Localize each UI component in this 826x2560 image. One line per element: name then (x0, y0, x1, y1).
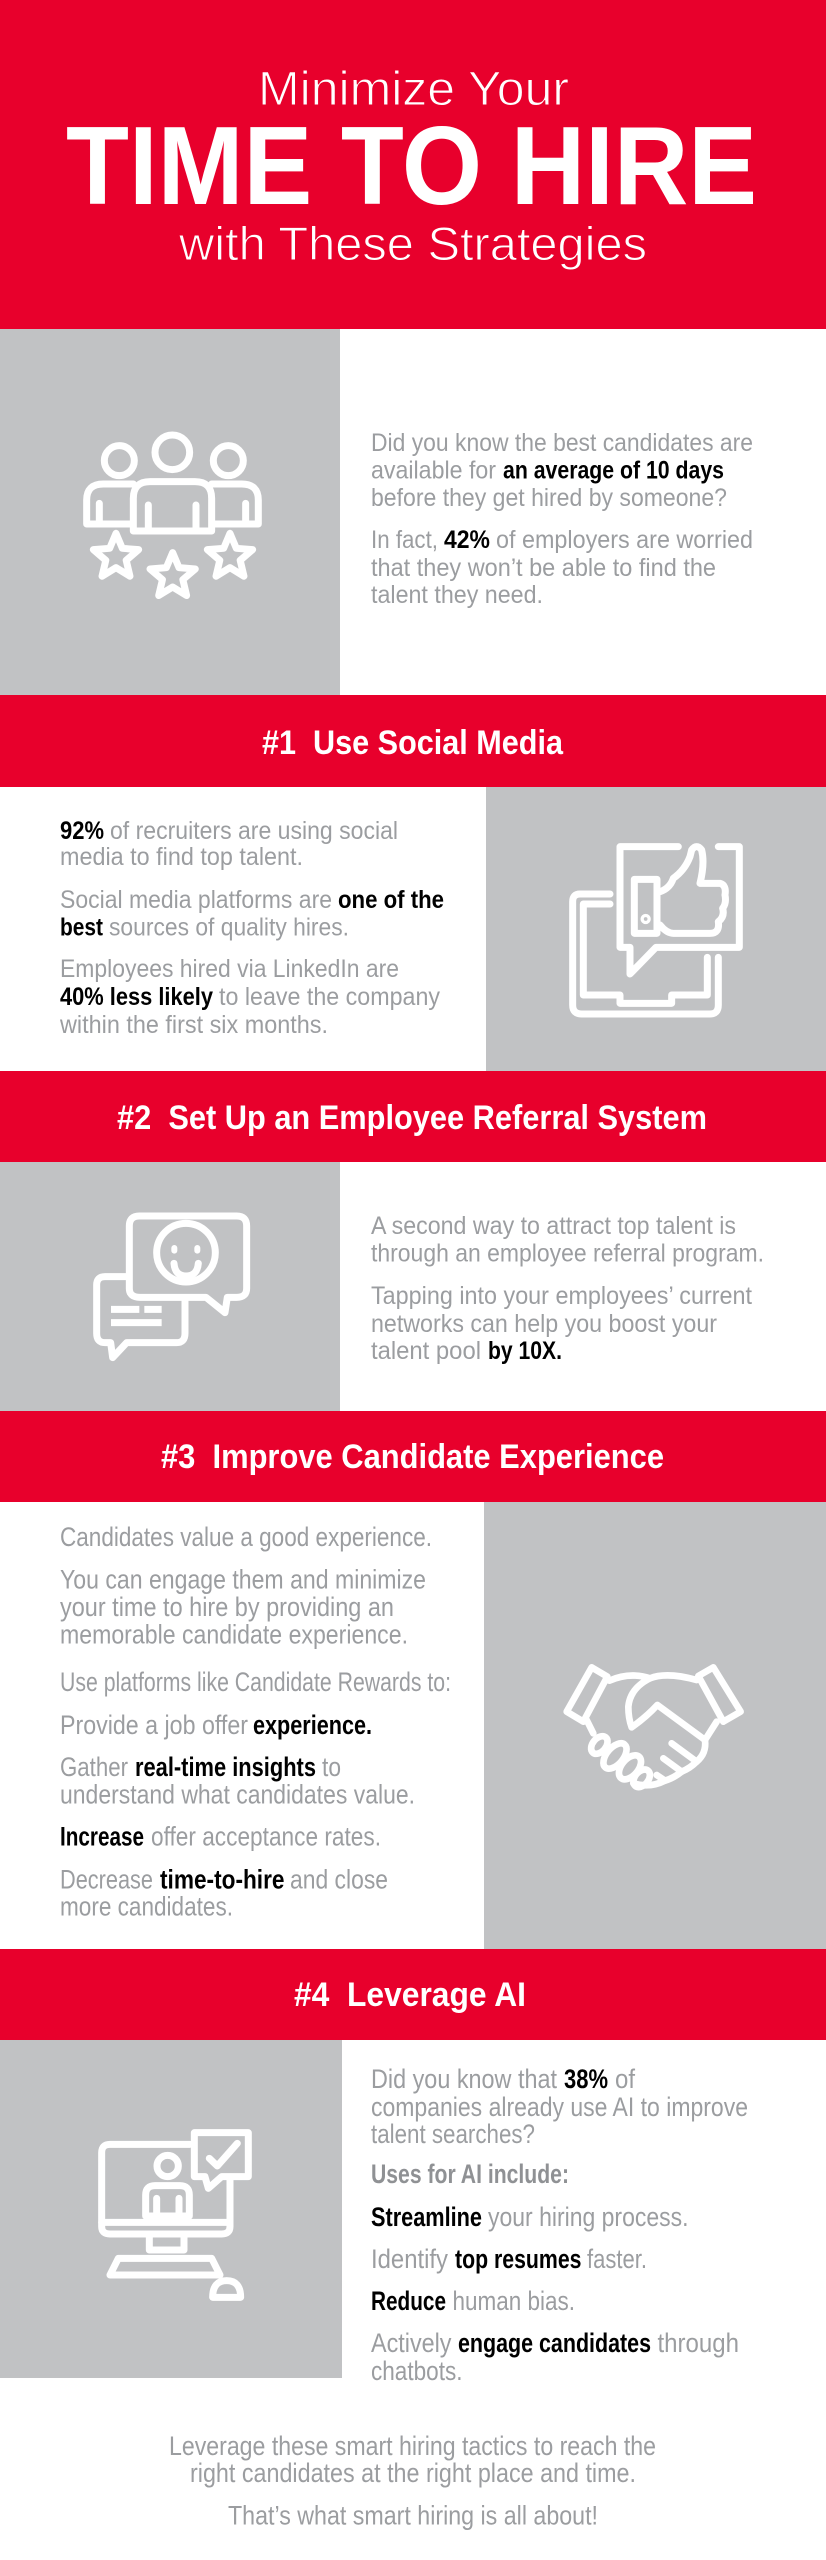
text block: leverage AI: top resumes (455, 2244, 582, 2274)
text block: intro: In fact, (371, 526, 438, 554)
text block: referral system (371, 1212, 764, 1365)
text block: candidate experience: your time to hire by providing an (60, 1592, 394, 1622)
text block: intro: that they won’t be able to find the (371, 554, 716, 582)
text block: referral system: networks can help you boost your (371, 1310, 717, 1338)
icon: people with stars (87, 435, 258, 596)
heading band: #4 Leverage AI (0, 1949, 826, 2040)
panel: intro (0, 329, 753, 695)
text block: intro (371, 429, 753, 609)
text block: social media: best (60, 914, 104, 942)
text block: candidate experience: offer acceptance rates. (151, 1822, 381, 1852)
text block: social media: of recruiters are using social (110, 817, 398, 845)
text block: candidate experience: more candidates. (60, 1892, 233, 1922)
panel: referral system (0, 1162, 764, 1411)
heading band: #1 Use Social Media: #1 Use Social Media (262, 724, 564, 762)
text block: leverage AI: through (658, 2328, 739, 2358)
text block: leverage AI: Identify (371, 2244, 449, 2274)
text block: leverage AI: Streamline (371, 2202, 482, 2232)
text block: intro: of employers are worried (496, 526, 753, 554)
heading band: #1 Use Social Media (0, 695, 826, 787)
text block: candidate experience: Decrease (60, 1864, 153, 1894)
text block: candidate experience: Use platforms like Candidate Rewards to: (60, 1667, 451, 1697)
heading band: #2 Set Up an Employee Referral System: #2 Set Up an Employee Referral System (117, 1099, 707, 1137)
text block: leverage AI: 38% (564, 2064, 608, 2094)
text block: intro: an average of 10 days (503, 456, 724, 484)
heading band: #4 Leverage AI: #4 Leverage AI (294, 1976, 526, 2014)
panel: social media (59, 787, 826, 1071)
text block: social media: Social media platforms are (60, 886, 332, 914)
text block: candidate experience: real-time insights (135, 1752, 316, 1782)
text block: leverage AI (371, 2064, 748, 2386)
text block: social media: Employees hired via LinkedIn are (60, 955, 399, 983)
text block: candidate experience: Candidates value a good experience. (60, 1522, 432, 1552)
text block: leverage AI: Did you know that (371, 2064, 558, 2094)
heading band: #3 Improve Candidate Experience (0, 1411, 826, 1502)
text block: candidate experience: Gather (60, 1752, 128, 1782)
text block: social media: within the first six months. (59, 1011, 328, 1039)
text block: social media (59, 817, 444, 1039)
text block: referral system: Tapping into your employees’ current (371, 1282, 752, 1310)
text block: candidate experience: Increase (60, 1822, 144, 1852)
icon: chat bubbles with smile (97, 1216, 247, 1358)
heading band: #3 Improve Candidate Experience: #3 Improve Candidate Experience (161, 1438, 664, 1476)
text block: candidate experience (60, 1522, 451, 1922)
text block: social media: media to find top talent. (60, 843, 303, 871)
text block: referral system: talent pool (371, 1337, 481, 1365)
text block: candidate experience: memorable candidate experience. (60, 1620, 408, 1650)
text block: leverage AI: companies already use AI to improve (371, 2092, 748, 2122)
text block: intro: talent they need. (371, 581, 543, 609)
icon: computer with person and checkmark (102, 2133, 248, 2297)
text block: intro: before they get hired by someone? (371, 484, 727, 512)
title: Minimize Your (258, 63, 569, 116)
text block: intro: Did you know the best candidates are (371, 429, 753, 457)
text block: leverage AI: Actively (371, 2328, 452, 2358)
closing text: Leverage these smart hiring tactics to reach the (169, 2431, 656, 2461)
text block: referral system: A second way to attract top talent is (371, 1212, 736, 1240)
title: TIME TO HIRE (66, 104, 757, 228)
text block: candidate experience: experience. (253, 1710, 372, 1740)
text block: social media: 92% (60, 817, 104, 845)
text block: leverage AI: talent searches? (371, 2119, 535, 2149)
text block: social media: 40% less likely (60, 983, 213, 1011)
closing text: That’s what smart hiring is all about! (228, 2500, 598, 2530)
text block: candidate experience: time-to-hire (160, 1864, 284, 1894)
text block: social media: to leave the company (219, 983, 440, 1011)
text block: leverage AI: Reduce (371, 2286, 446, 2316)
text block: leverage AI: of (615, 2064, 636, 2094)
text block: leverage AI: engage candidates (458, 2328, 651, 2358)
heading band: #2 Set Up an Employee Referral System (0, 1071, 826, 1162)
title (66, 63, 757, 270)
text block: candidate experience: understand what candidates value. (60, 1780, 415, 1810)
text block: social media: sources of quality hires. (109, 914, 349, 942)
closing text (169, 2431, 656, 2530)
title: with These Strategies (178, 217, 647, 270)
text block: leverage AI: Uses for AI include: (371, 2159, 569, 2189)
icon: handshake (567, 1667, 741, 1790)
panel: leverage AI (0, 2040, 748, 2386)
text block: leverage AI: faster. (587, 2244, 647, 2274)
closing text: right candidates at the right place and time. (190, 2458, 636, 2488)
text block: social media: one of the (338, 886, 444, 914)
text block: leverage AI: your hiring process. (488, 2202, 688, 2232)
text block: candidate experience: You can engage them and minimize (60, 1564, 426, 1594)
text block: leverage AI: chatbots. (371, 2356, 462, 2386)
text block: leverage AI: human bias. (452, 2286, 575, 2316)
text block: candidate experience: to (322, 1752, 341, 1782)
text block: intro: available for (371, 456, 496, 484)
panel: candidate experience (60, 1502, 826, 1949)
icon: laptop with thumbs up (573, 847, 739, 1014)
text block: referral system: by 10X. (488, 1337, 562, 1365)
header banner (0, 0, 826, 329)
text block: candidate experience: and close (290, 1864, 388, 1894)
text block: candidate experience: Provide a job offer (60, 1710, 248, 1740)
text block: intro: 42% (444, 526, 490, 554)
text block: referral system: through an employee referral program. (371, 1240, 764, 1268)
